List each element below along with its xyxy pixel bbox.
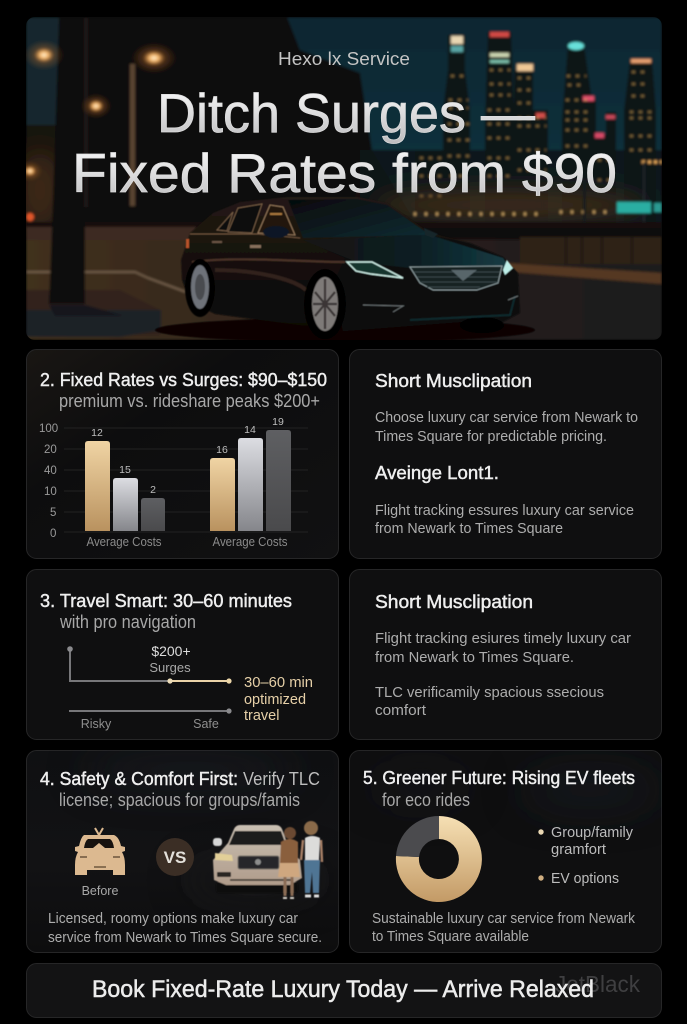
text block	[375, 410, 638, 445]
text block: comfort	[375, 703, 426, 719]
subheading: license; spacious for groups/famis	[59, 790, 300, 810]
subheading: Aveinge Lont1.	[375, 462, 499, 483]
legend: gramfort	[551, 842, 606, 858]
heading: Verify TLC	[243, 769, 320, 789]
panel: hero	[16, 17, 662, 342]
vs badge	[156, 838, 194, 876]
y axis labels: 0	[50, 528, 56, 540]
axis labels	[81, 717, 219, 731]
heading: Short Musclipation	[375, 591, 533, 612]
text block: Licensed, roomy options make luxury car	[48, 911, 298, 927]
y axis labels: 10	[44, 486, 57, 498]
icon: suv with family	[213, 821, 322, 898]
optimized travel label: travel	[244, 708, 279, 724]
y axis labels: 40	[44, 465, 57, 477]
panel: travel smart	[26, 570, 338, 740]
panel: greener future	[350, 750, 662, 952]
x axis labels	[86, 535, 288, 549]
heading: 4. Safety & Comfort First:	[40, 768, 238, 789]
legend: EV options	[551, 871, 619, 887]
title: Ditch Surges —	[157, 82, 535, 144]
before label: Before	[82, 884, 118, 898]
text block: Sustainable luxury car service from Newark	[372, 911, 636, 927]
hero night city background	[16, 17, 662, 340]
x axis labels: Average Costs	[212, 535, 288, 549]
text block: Choose luxury car service from Newark to	[375, 410, 638, 426]
icon: before car	[75, 828, 125, 875]
text block: Times Square for predictable pricing.	[375, 429, 607, 445]
text block	[375, 685, 604, 719]
title: Fixed Rates from $90	[72, 142, 617, 204]
call to action bar	[26, 964, 662, 1018]
vs badge: VS	[164, 848, 186, 867]
heading: 2. Fixed Rates vs Surges: $90–$150	[40, 369, 327, 390]
optimized travel label: optimized	[244, 692, 306, 708]
donut chart	[396, 816, 482, 902]
text block: to Times Square available	[372, 929, 529, 945]
legend	[538, 825, 634, 887]
person: adult	[301, 821, 322, 896]
right bars: 19	[272, 416, 284, 428]
bar chart	[39, 416, 308, 549]
panel: short musclipation tracking	[350, 570, 662, 740]
left bars: 2	[150, 484, 156, 496]
panel: safety and comfort	[26, 750, 338, 952]
y axis labels	[39, 423, 58, 540]
call to action text: Book Fixed-Rate Luxury Today — Arrive Relaxed	[92, 976, 594, 1003]
icon: luxury black sedan	[155, 197, 535, 342]
surge label	[149, 643, 191, 675]
panel: short musclipation pricing	[350, 350, 662, 558]
surge label: $200+	[151, 643, 191, 659]
y axis labels: 5	[50, 507, 56, 519]
text block	[48, 911, 322, 946]
text block: Flight tracking essures luxury car service	[375, 503, 634, 519]
title	[72, 82, 617, 204]
subheading: for eco rides	[382, 790, 470, 810]
left bars	[85, 427, 165, 531]
text block	[375, 503, 634, 537]
text block: from Newark to Times Square.	[375, 650, 574, 666]
surge label: Surges	[149, 660, 191, 675]
subheading: with pro navigation	[59, 612, 196, 632]
heading: Short Musclipation	[375, 370, 532, 391]
optimized travel label	[244, 675, 313, 724]
left bars: 15	[119, 464, 131, 476]
heading: 5. Greener Future: Rising EV fleets	[363, 767, 635, 788]
watermark: JetBlack	[555, 971, 640, 997]
text block: service from Newark to Times Square secure.	[48, 930, 322, 946]
heading: 3. Travel Smart: 30–60 minutes	[40, 590, 292, 611]
right bars	[210, 416, 291, 531]
route comparison chart	[67, 643, 313, 731]
optimized travel label: 30–60 min	[244, 675, 313, 691]
person: child	[278, 827, 300, 898]
y axis labels: 20	[44, 444, 57, 456]
text block: Flight tracking esiures timely luxury car	[375, 631, 631, 647]
text block	[375, 631, 631, 666]
right bars: 14	[244, 424, 256, 436]
subheading: premium vs. rideshare peaks $200+	[59, 391, 320, 411]
x axis labels: Average Costs	[86, 535, 162, 549]
legend: Group/family	[551, 825, 634, 841]
text block: TLC verificamily spacious ssecious	[375, 685, 604, 701]
axis labels: Safe	[193, 717, 219, 731]
text block	[372, 911, 636, 945]
axis labels: Risky	[81, 717, 112, 731]
text block: from Newark to Times Square	[375, 521, 563, 537]
panel: fixed rates vs surges	[26, 350, 338, 558]
left bars: 12	[91, 427, 103, 439]
y axis labels: 100	[39, 423, 58, 435]
right bars: 16	[216, 444, 228, 456]
hero brand line: Hexo lx Service	[278, 49, 410, 69]
